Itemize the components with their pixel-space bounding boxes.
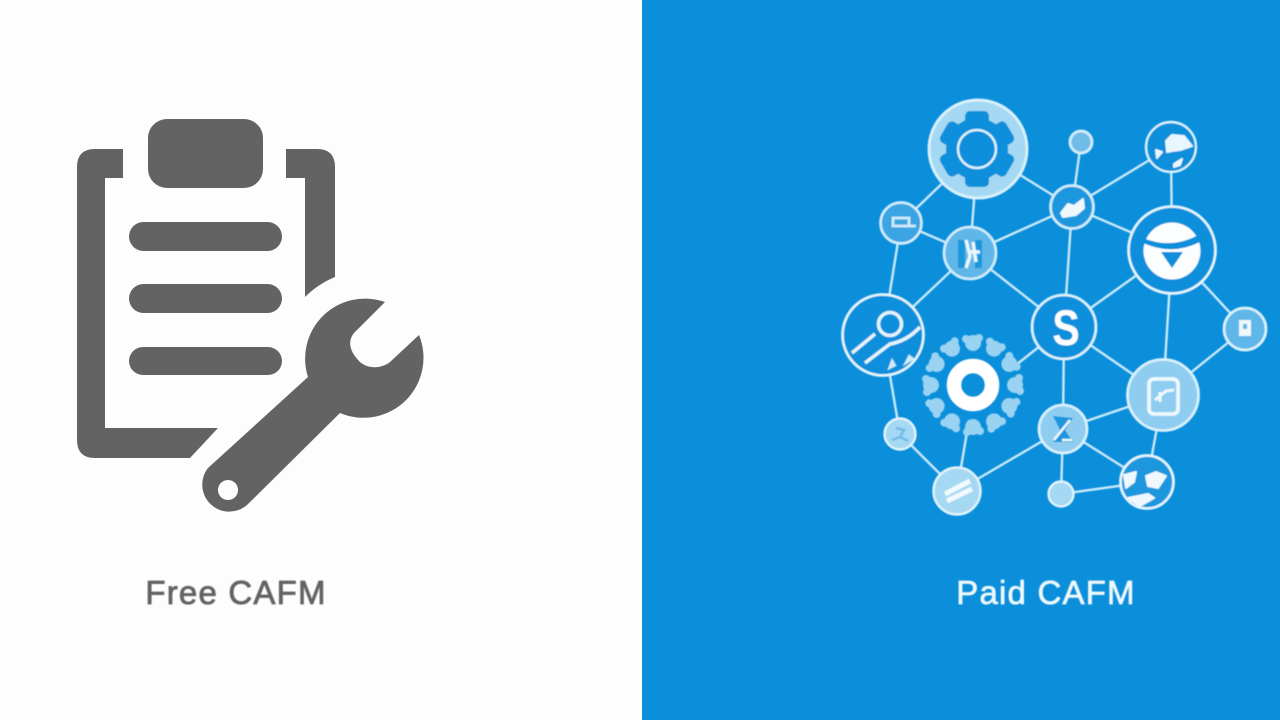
- panel: paid CAFM background: [642, 0, 1280, 720]
- node: large gear: [929, 100, 1027, 198]
- node: globe: [1120, 456, 1174, 508]
- node: magnifier: [842, 294, 924, 376]
- node: central gear with petals: [922, 334, 1024, 436]
- heading: Paid CAFM: Paid CAFM: [956, 574, 1136, 611]
- node: small top dot: [1070, 131, 1092, 153]
- node: crossed tools: [1039, 405, 1087, 453]
- node: large filter badge: [1128, 206, 1216, 294]
- wrench: [202, 299, 423, 512]
- checklist line 2: [129, 284, 282, 313]
- node: small bottom dot: [1048, 482, 1074, 506]
- heading: Free CAFM: Free CAFM: [145, 574, 327, 611]
- node: small lower left: [884, 418, 916, 450]
- checklist line 3: [129, 347, 282, 375]
- checklist line 1: [129, 222, 282, 251]
- chart: network of connected service nodes: [842, 100, 1266, 514]
- panel: free CAFM background: [0, 0, 642, 720]
- clipboard clip: [148, 119, 263, 188]
- node: S: [1032, 295, 1096, 359]
- node: light document: [1128, 360, 1198, 430]
- network connection lines: [883, 142, 1245, 494]
- icon: clipboard with wrench: [77, 119, 423, 512]
- node: small chat: [1050, 186, 1094, 228]
- node: S: S: [1052, 300, 1080, 356]
- clipboard frame: [77, 149, 335, 458]
- node: laptop: [880, 202, 922, 244]
- node: bottom cloud: [934, 468, 980, 514]
- node: top right cluster: [1146, 122, 1196, 172]
- node: right document: [1224, 308, 1266, 350]
- node: tools: [944, 227, 996, 279]
